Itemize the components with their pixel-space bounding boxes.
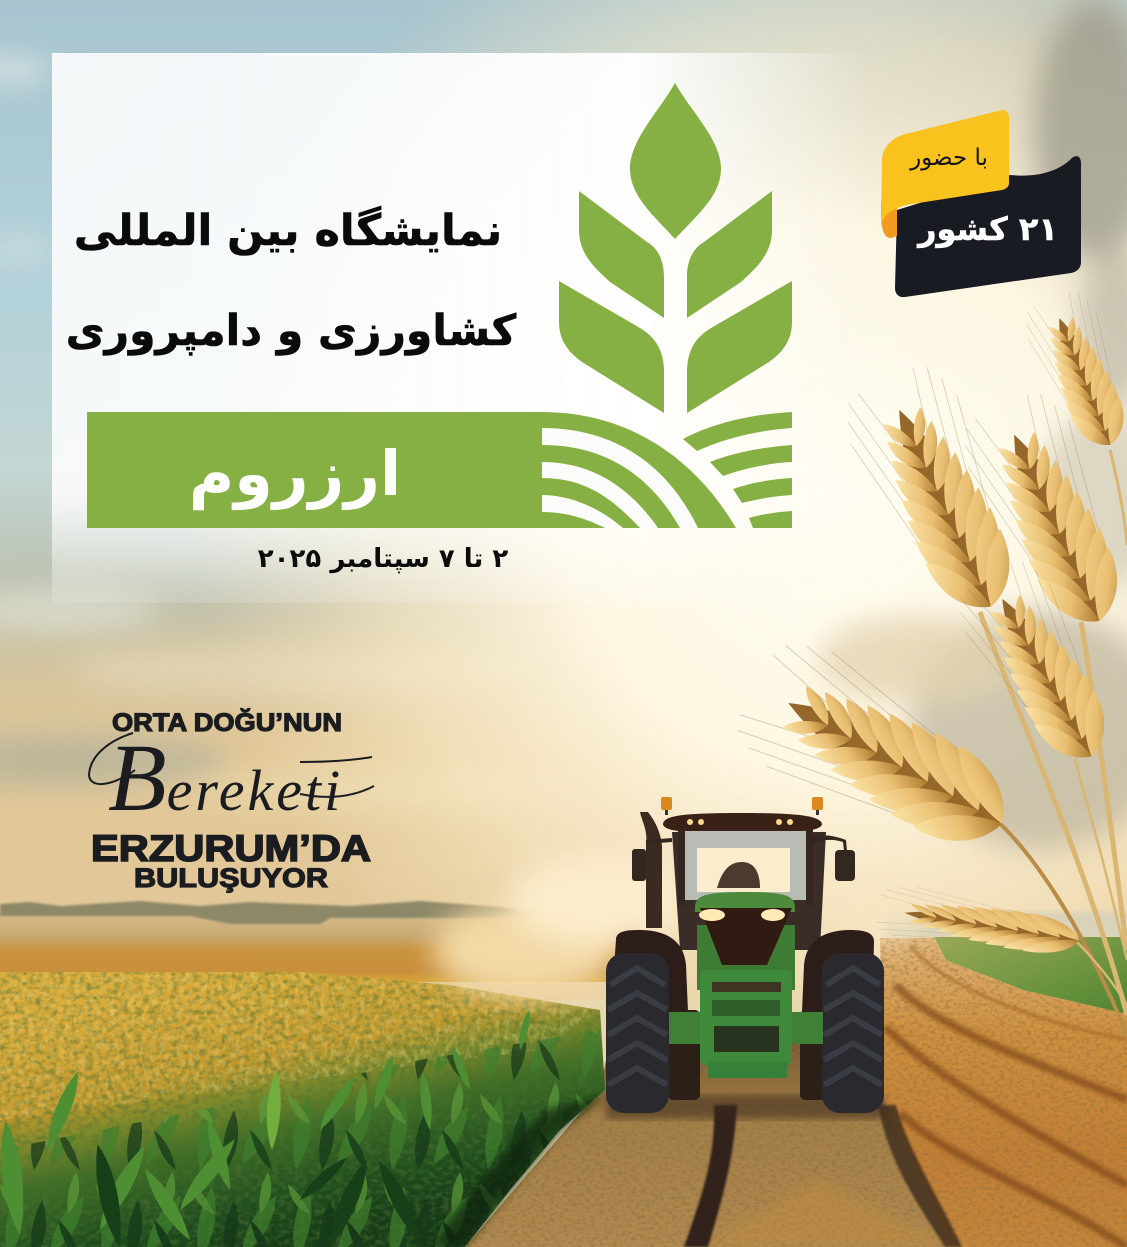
wheat ear: upper left xyxy=(833,356,1044,631)
wheat stems xyxy=(980,450,1127,1035)
slogan line 3: BULUŞUYOR xyxy=(134,863,328,893)
dust cloud behind tractor xyxy=(433,855,925,998)
badge large text: ۲۱ کشور xyxy=(916,210,1058,248)
date: ۲ تا ۷ سپتامبر ۲۰۲۵ xyxy=(258,544,508,574)
black ribbon xyxy=(895,156,1081,297)
top leaf xyxy=(630,83,721,239)
far right horizon xyxy=(885,912,1127,938)
ground shadow xyxy=(606,1095,884,1119)
background: sun glow xyxy=(180,0,1127,1000)
title line 2: کشاورزی و دامپروری xyxy=(66,307,517,356)
fenders xyxy=(613,930,874,1012)
title line 1: نمایشگاه بین المللی xyxy=(74,205,502,256)
corn leaves layer xyxy=(0,1030,605,1247)
tractor body xyxy=(669,892,823,1078)
green field far right xyxy=(934,937,1127,1014)
white furrows xyxy=(542,428,698,528)
panel: translucent white xyxy=(52,53,872,603)
wheat ear: middle xyxy=(947,551,1127,780)
exhaust pipe xyxy=(640,812,662,928)
wheat ear: low flat xyxy=(874,882,1083,967)
orange fold xyxy=(881,200,897,238)
background: cloud bank xyxy=(0,58,570,810)
beacons xyxy=(661,797,823,815)
wheat ear: top right xyxy=(1018,285,1127,459)
background: right clouds xyxy=(820,0,1127,850)
cab xyxy=(663,813,826,950)
right furrow xyxy=(878,1105,962,1247)
corn edge shadow xyxy=(430,1095,605,1247)
right furrows xyxy=(683,412,792,451)
slogan line 2: ERZURUM’DA xyxy=(91,828,371,869)
badge: 21 countries xyxy=(881,110,1081,297)
badge small text: با حضور xyxy=(909,145,988,171)
centre furrow xyxy=(684,1105,737,1247)
front wheels xyxy=(606,953,884,1113)
logo: green wheat and field xyxy=(87,83,792,528)
background: top right haze xyxy=(740,0,1127,400)
slogan script: Bereketi xyxy=(108,724,343,831)
lower left leaf xyxy=(559,281,664,413)
city name: ارزروم xyxy=(189,437,401,511)
harvested striped field right xyxy=(880,938,1127,1247)
mirrors xyxy=(632,835,855,881)
corn field xyxy=(0,972,605,1247)
corn leaves dark xyxy=(86,1143,429,1247)
rear wheels xyxy=(668,1010,826,1100)
wheat ear: large leaning xyxy=(724,628,1034,881)
stubble road xyxy=(465,1040,962,1247)
tractor xyxy=(606,797,884,1113)
corn leaves bright xyxy=(0,1008,532,1243)
slogan xyxy=(89,708,374,893)
lower right leaf xyxy=(687,281,792,413)
slogan line 1: ORTA DOĞU’NUN xyxy=(112,708,342,737)
green band xyxy=(87,412,736,528)
far fields and tree line xyxy=(0,901,640,982)
yellow ribbon xyxy=(881,110,1009,228)
wheat ear: upper right xyxy=(951,384,1127,644)
middle right leaf xyxy=(687,191,772,318)
middle left leaf xyxy=(579,191,664,318)
